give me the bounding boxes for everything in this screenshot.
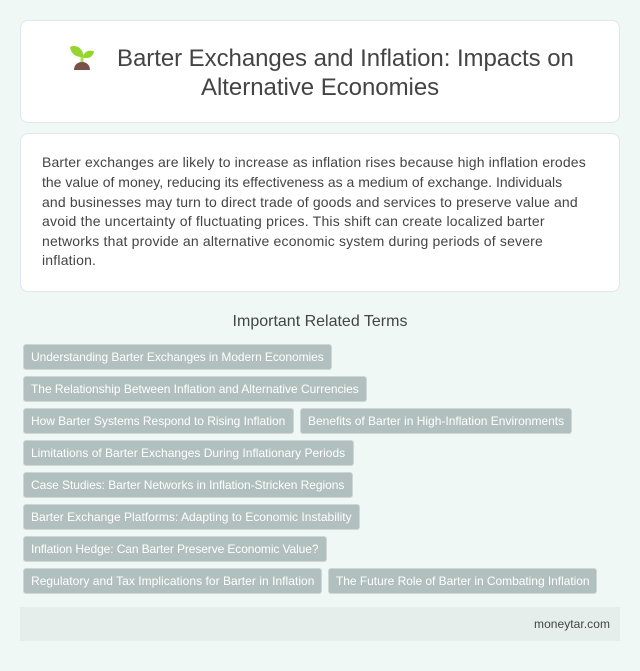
text block: description	[42, 154, 586, 268]
tag: inflation and currencies: The Relationship Between Inflation and Alternative Currencies	[31, 382, 359, 396]
tag: future role	[328, 568, 597, 594]
heading: related terms: Important Related Terms	[233, 313, 407, 330]
tag: understanding barter	[23, 344, 332, 370]
tag: regulatory: Regulatory and Tax Implications for Barter in Inflation	[31, 574, 314, 588]
text block: description: and businesses may turn to direct trade of goods and services to preserve value and	[42, 194, 578, 210]
title second line: Alternative Economies	[201, 74, 439, 101]
text block: description: inflation.	[42, 252, 96, 268]
text block: description: Barter exchanges are likely to increase as inflation rises because high inflation erodes	[42, 154, 586, 170]
tag: inflation hedge: Inflation Hedge: Can Barter Preserve Economic Value?	[31, 542, 318, 556]
text block: description: networks that provide an alternative economic system during periods of severe	[42, 233, 543, 249]
tag: platforms	[23, 504, 360, 530]
tag: regulatory	[23, 568, 322, 594]
footer source text: moneytar.com	[534, 617, 610, 631]
panel: description card	[20, 133, 620, 292]
tag: benefits	[300, 408, 572, 434]
tag: case studies: Case Studies: Barter Networks in Inflation-Stricken Regions	[31, 478, 344, 492]
text block: description: the value of money, reducing its effectiveness as a medium of exchange. Individuals	[42, 174, 562, 190]
tag: barter response: How Barter Systems Respond to Rising Inflation	[31, 414, 285, 428]
title: Barter Exchanges and Inflation: Impacts on	[117, 45, 574, 72]
tag: understanding barter: Understanding Barter Exchanges in Modern Economies	[31, 350, 324, 364]
panel: title card	[20, 20, 620, 123]
tag: platforms: Barter Exchange Platforms: Adapting to Economic Instability	[31, 510, 352, 524]
icon: seedling	[70, 46, 94, 70]
tag: future role: The Future Role of Barter in Combating Inflation	[336, 574, 590, 588]
tag: inflation and currencies	[23, 376, 367, 402]
text block: description: avoid the uncertainty of fluctuating prices. This shift can create localized barter	[42, 213, 545, 229]
tag: barter response	[23, 408, 294, 434]
tag: case studies	[23, 472, 353, 498]
tag: inflation hedge	[23, 536, 327, 562]
tag: limitations	[23, 440, 354, 466]
tag: benefits: Benefits of Barter in High-Inflation Environments	[308, 414, 564, 428]
footer	[20, 607, 620, 641]
tag: limitations: Limitations of Barter Exchanges During Inflationary Periods	[31, 446, 345, 460]
